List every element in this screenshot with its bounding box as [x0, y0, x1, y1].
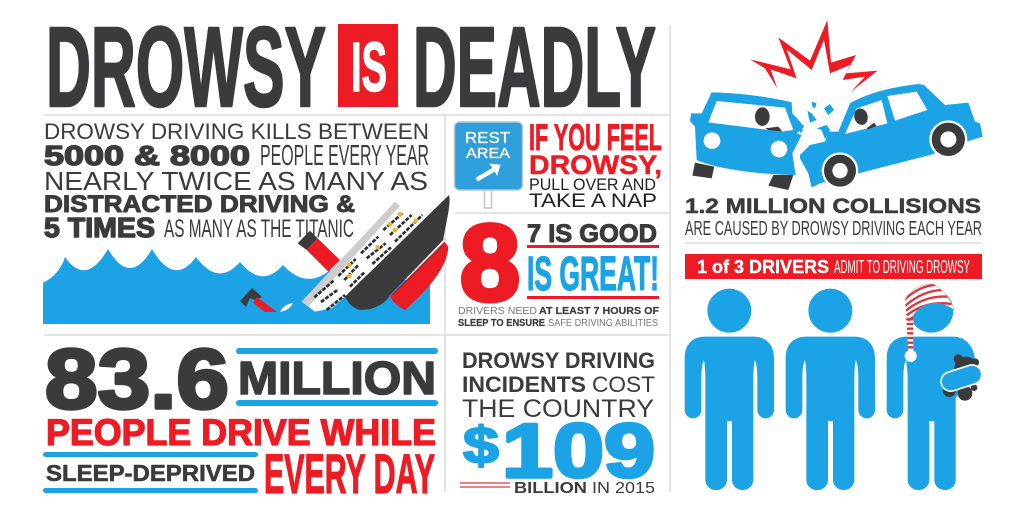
icon: rest area sign: AREA: [466, 145, 510, 162]
panel: cost to the country: IN 2015: [592, 480, 655, 497]
ship stern piece: [240, 288, 293, 312]
panel: 8 is great: SLEEP TO ENSURE: [458, 318, 545, 329]
panel: 8 is great: IS GREAT!: [527, 248, 659, 301]
icon: person two: [786, 289, 875, 490]
panel: 8 is great: SAFE DRIVING ABILITIES: [548, 318, 658, 329]
text block: drowsy driving deaths: NEARLY TWICE AS MANY AS: [44, 166, 428, 196]
panel: cost to the country: COST: [592, 372, 655, 397]
teddy bear: [943, 354, 979, 401]
panel: 8 is great: AT LEAST 7 HOURS OF: [539, 306, 659, 317]
icon: rest area sign: [454, 122, 522, 208]
text block: collisions: [685, 195, 982, 240]
icon: car crash: [690, 20, 983, 190]
callout: if you feel drowsy: PULL OVER AND: [529, 176, 656, 194]
panel: cost to the country: $: [463, 417, 499, 475]
panel: 8 is great: [458, 202, 659, 329]
text block: collisions: 1.2 MILLION COLLISIONS: [685, 195, 981, 218]
panel: 8 is great: DRIVERS NEED: [458, 306, 537, 317]
icon: person one: [685, 289, 774, 490]
text block: drowsy driving deaths: 5 TIMES: [44, 212, 155, 243]
callout: if you feel drowsy: DROWSY,: [529, 150, 662, 180]
callout: if you feel drowsy: [529, 117, 662, 212]
teddy arm: [939, 362, 984, 394]
title: IS: [351, 28, 387, 106]
panel: 83.6 million: PEOPLE DRIVE WHILE: [46, 412, 436, 453]
ship keel: [390, 242, 448, 310]
callout: if you feel drowsy: TAKE A NAP: [529, 190, 657, 212]
panel: 8 is great: 7 IS GOOD: [527, 220, 657, 248]
ocean waves: [43, 249, 430, 324]
panel: cost to the country: 109: [502, 409, 655, 494]
panel: 8 is great: 8: [460, 202, 520, 323]
callout: if you feel drowsy: IF YOU FEEL: [529, 117, 662, 158]
text block: drowsy driving deaths: DISTRACTED DRIVING &: [44, 191, 355, 218]
panel: 83.6 million: 83.6: [45, 332, 229, 426]
panel: cost to the country: DROWSY DRIVING: [462, 348, 655, 373]
text block: drowsy driving deaths: PEOPLE EVERY YEAR: [260, 140, 429, 172]
panel: 83.6 million: EVERY DAY: [264, 442, 435, 505]
explosion: [750, 20, 878, 92]
panel: cost to the country: [460, 348, 655, 497]
person body: [887, 289, 975, 490]
panel: cost to the country: INCIDENTS: [462, 372, 586, 397]
panel: cost to the country: THE COUNTRY: [462, 395, 654, 423]
icon: drowsy person with teddy: [887, 289, 984, 490]
ship funnel: [298, 231, 340, 272]
text block: drowsy driving deaths: 5000 & 8000: [44, 140, 250, 171]
icon: rest area sign: REST: [465, 130, 510, 147]
title: DROWSY: [46, 4, 326, 130]
text block: drowsy driving deaths: DROWSY DRIVING KILLS BETWEEN: [44, 119, 429, 144]
left car: [690, 92, 804, 190]
text block: drowsy driving deaths: [44, 119, 429, 243]
panel: 83.6 million: MILLION: [238, 352, 436, 404]
ship superstructure: [302, 195, 447, 312]
panel: cost to the country: BILLION: [514, 480, 587, 497]
banner: 1 of 3 drivers: 1 of 3 DRIVERS: [697, 257, 829, 277]
right car: [800, 84, 983, 189]
nightcap: [904, 284, 954, 362]
icon: sinking titanic: [298, 195, 450, 312]
panel: 83.6 million: SLEEP-DEPRIVED: [46, 460, 255, 486]
text block: drowsy driving deaths: AS MANY AS THE TITANIC: [164, 215, 354, 243]
panel: 83.6 million: [43, 332, 438, 505]
banner: 1 of 3 drivers: [685, 254, 982, 279]
title: DEADLY: [413, 4, 656, 130]
debris: [800, 102, 834, 139]
ship hull: [345, 195, 450, 310]
